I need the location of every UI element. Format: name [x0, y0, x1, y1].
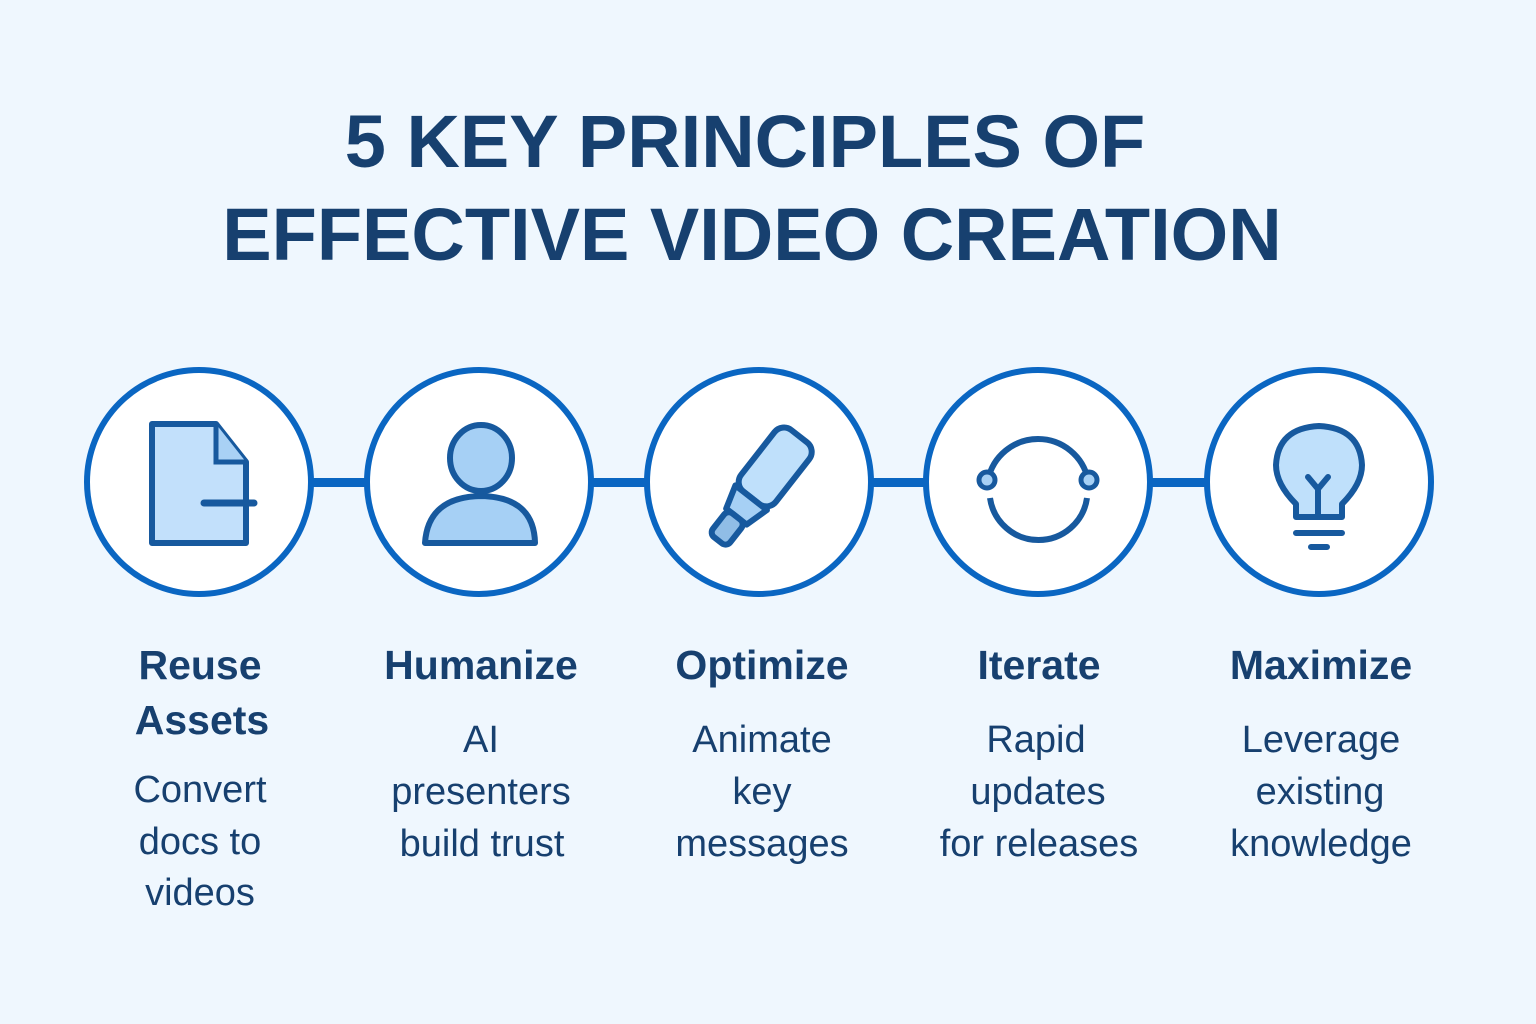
step 2: humanize: build trust	[400, 823, 565, 865]
step 1: reuse assets: videos	[145, 872, 255, 914]
step 2: humanize: presenters	[391, 771, 571, 813]
description: Animate	[692, 719, 832, 761]
heading: Reuse	[138, 642, 262, 688]
step 4: iterate	[926, 370, 1150, 865]
heading: Maximize	[1230, 642, 1412, 688]
icon: light bulb	[1207, 370, 1431, 594]
step 1: reuse assets: docs to	[139, 821, 261, 863]
icon: refresh cycle	[926, 370, 1150, 594]
icon: highlighter	[647, 370, 871, 594]
title: 5 KEY PRINCIPLES OF	[345, 100, 1145, 183]
step 3: optimize: key	[732, 771, 792, 813]
step 4: iterate: updates	[970, 771, 1106, 813]
step 5: maximize: knowledge	[1230, 823, 1412, 865]
step 1: reuse assets	[87, 370, 311, 914]
step 5: maximize: existing	[1256, 771, 1384, 813]
step 3: optimize	[647, 370, 871, 865]
description: Rapid	[986, 719, 1086, 761]
heading: Iterate	[977, 642, 1101, 688]
step 4: iterate: for releases	[940, 823, 1138, 865]
title: EFFECTIVE VIDEO CREATION	[222, 193, 1282, 276]
step 3: optimize: messages	[675, 823, 849, 865]
description: Leverage	[1242, 719, 1400, 761]
step 2: humanize	[367, 370, 591, 865]
icon: document	[87, 370, 311, 594]
icon: person	[367, 370, 591, 594]
step 5: maximize	[1207, 370, 1431, 865]
connector line	[300, 478, 1230, 487]
step 1: reuse assets: Assets	[135, 697, 269, 743]
heading: Optimize	[675, 642, 849, 688]
heading: Humanize	[384, 642, 578, 688]
description: Convert	[133, 769, 267, 811]
title	[222, 100, 1282, 276]
description: AI	[463, 719, 499, 761]
